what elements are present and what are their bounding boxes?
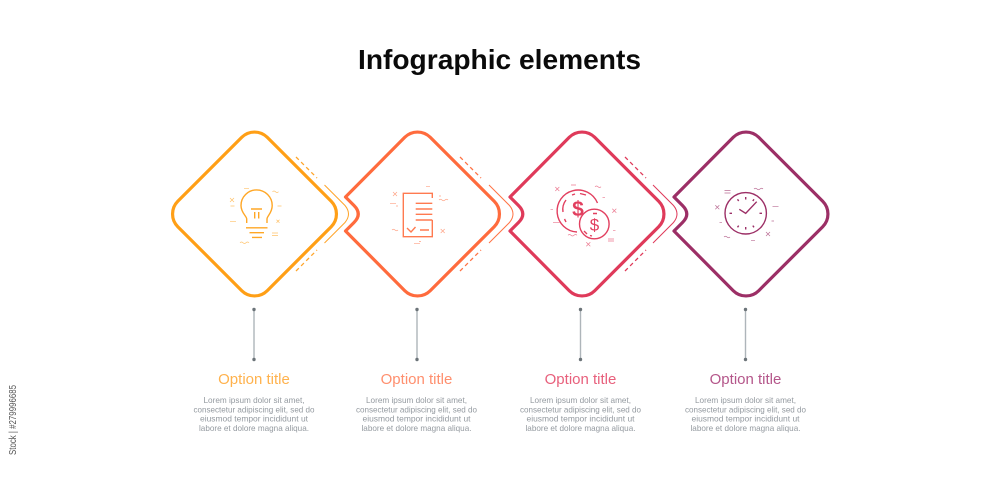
icon: clock (715, 188, 778, 240)
arrow: chevron after step 1 (296, 157, 348, 271)
arrow: chevron after step 2 (460, 157, 513, 271)
description: consectetur adipiscing elit, sed do (194, 404, 315, 414)
panel: step 1 diamond (173, 132, 336, 296)
description: eiusmod tempor incididunt ut (200, 414, 309, 424)
heading: Option title (381, 371, 452, 388)
description (194, 395, 315, 433)
panel: option 2 text (356, 308, 477, 433)
panel: option 1 text (194, 308, 315, 433)
connector (744, 308, 747, 361)
description: consectetur adipiscing elit, sed do (356, 404, 477, 414)
heading: Option title (710, 371, 781, 388)
arrow: chevron after step 3 (625, 157, 677, 271)
description: labore et dolore magna aliqua. (690, 423, 800, 433)
description (356, 395, 477, 433)
description (685, 395, 806, 433)
description: Lorem ipsum dolor sit amet, (530, 395, 631, 405)
panel: option 4 text (685, 308, 806, 433)
title: Infographic elements (358, 44, 641, 75)
description: eiusmod tempor incididunt ut (526, 414, 635, 424)
icon: document with check (390, 187, 448, 243)
panel: step 2 diamond (346, 132, 499, 296)
description: eiusmod tempor incididunt ut (362, 414, 471, 424)
icon: dollar coins (550, 185, 616, 246)
panel: step 3 diamond (510, 132, 664, 296)
description: consectetur adipiscing elit, sed do (520, 404, 641, 414)
heading: Option title (218, 371, 290, 388)
description: labore et dolore magna aliqua. (362, 423, 472, 433)
description: eiusmod tempor incididunt ut (692, 414, 800, 424)
connector (415, 308, 419, 361)
side stock id text: Stock | #279996685 (8, 385, 19, 455)
description: Lorem ipsum dolor sit amet, (366, 395, 467, 405)
description: labore et dolore magna aliqua. (526, 423, 636, 433)
panel: step 4 diamond (674, 132, 828, 296)
description: Lorem ipsum dolor sit amet, (695, 395, 796, 405)
icon: light bulb (230, 188, 282, 243)
heading: Option title (545, 371, 616, 388)
description: Lorem ipsum dolor sit amet, (204, 395, 304, 405)
description: labore et dolore magna aliqua. (199, 423, 309, 433)
connector (579, 308, 582, 361)
panel: option 3 text (520, 308, 641, 433)
description (520, 395, 641, 433)
connector (252, 308, 256, 361)
icon: dollar coins: $ (572, 198, 584, 221)
description: consectetur adipiscing elit, sed do (685, 404, 806, 414)
icon: dollar coins: $ (590, 216, 600, 234)
